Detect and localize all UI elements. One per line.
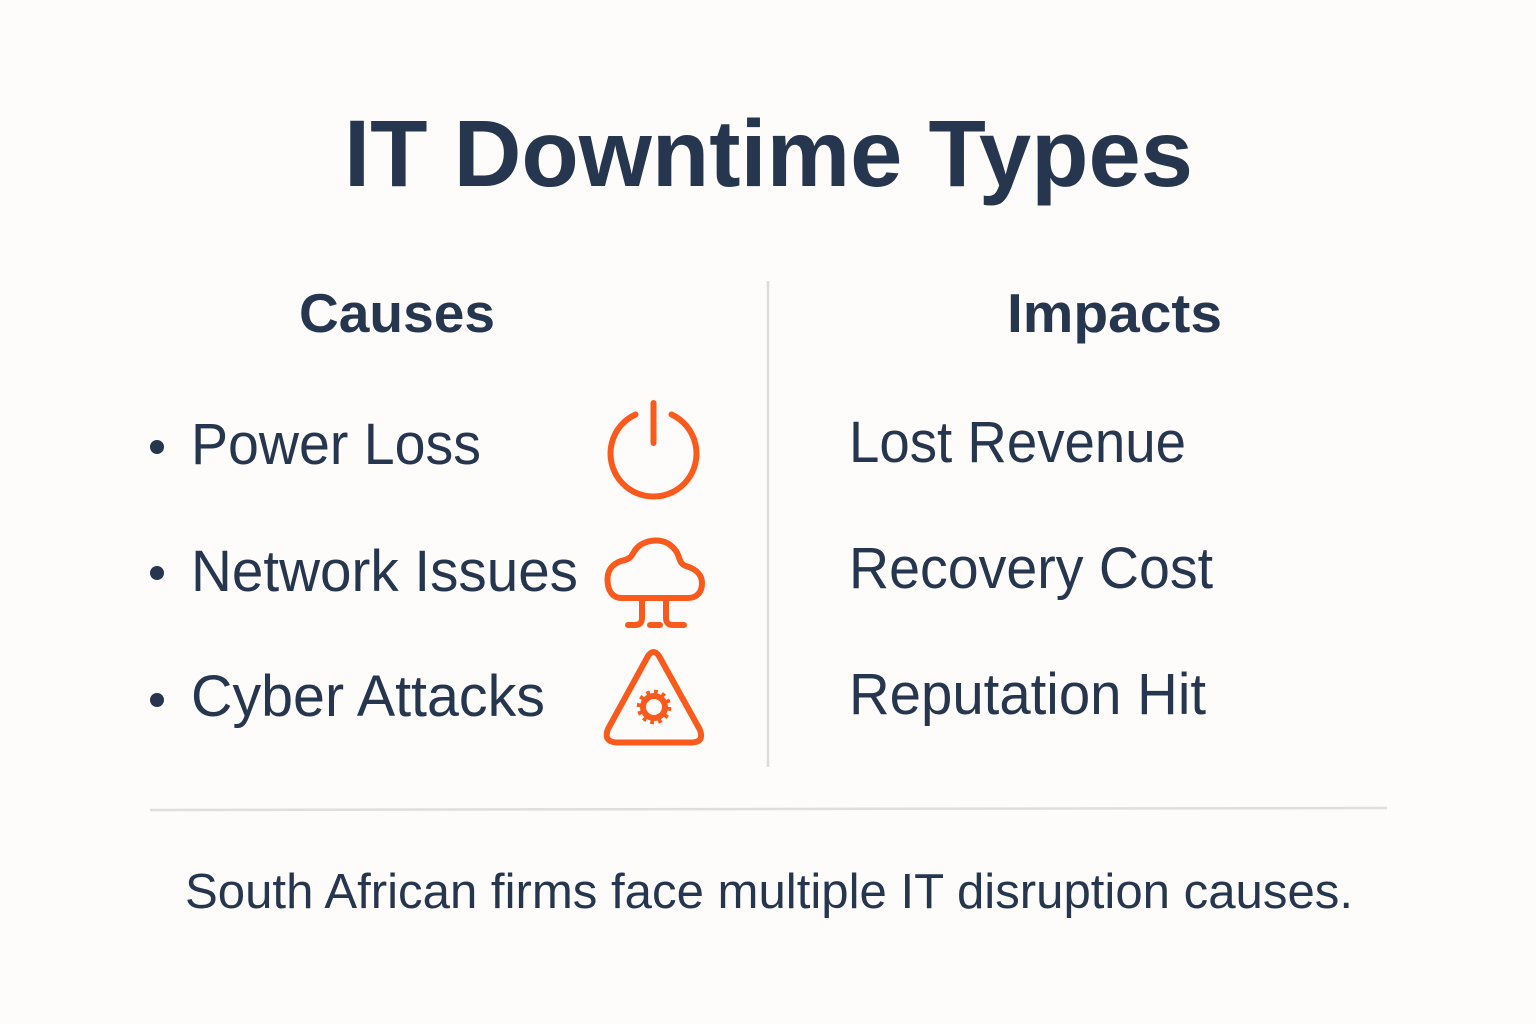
impact: recovery cost: Recovery Cost (849, 536, 1213, 601)
cause: cyber attacks: Cyber Attacks (191, 664, 545, 729)
heading: causes: Causes (299, 282, 495, 344)
icon: warning triangle with gear (607, 652, 701, 742)
cause: power loss: Power Loss (191, 412, 481, 477)
cause: network issues: Network Issues (191, 539, 578, 604)
icon: network cloud (608, 540, 702, 625)
title: IT Downtime Types (344, 101, 1193, 207)
panel: impacts (849, 282, 1222, 727)
heading: impacts: Impacts (1007, 282, 1222, 344)
impact: lost revenue: Lost Revenue (849, 410, 1186, 475)
panel: causes (150, 282, 702, 742)
impact: reputation hit: Reputation Hit (849, 662, 1206, 727)
icon: power (610, 403, 696, 497)
footer statement: South African firms face multiple IT disruption causes. (185, 865, 1353, 919)
